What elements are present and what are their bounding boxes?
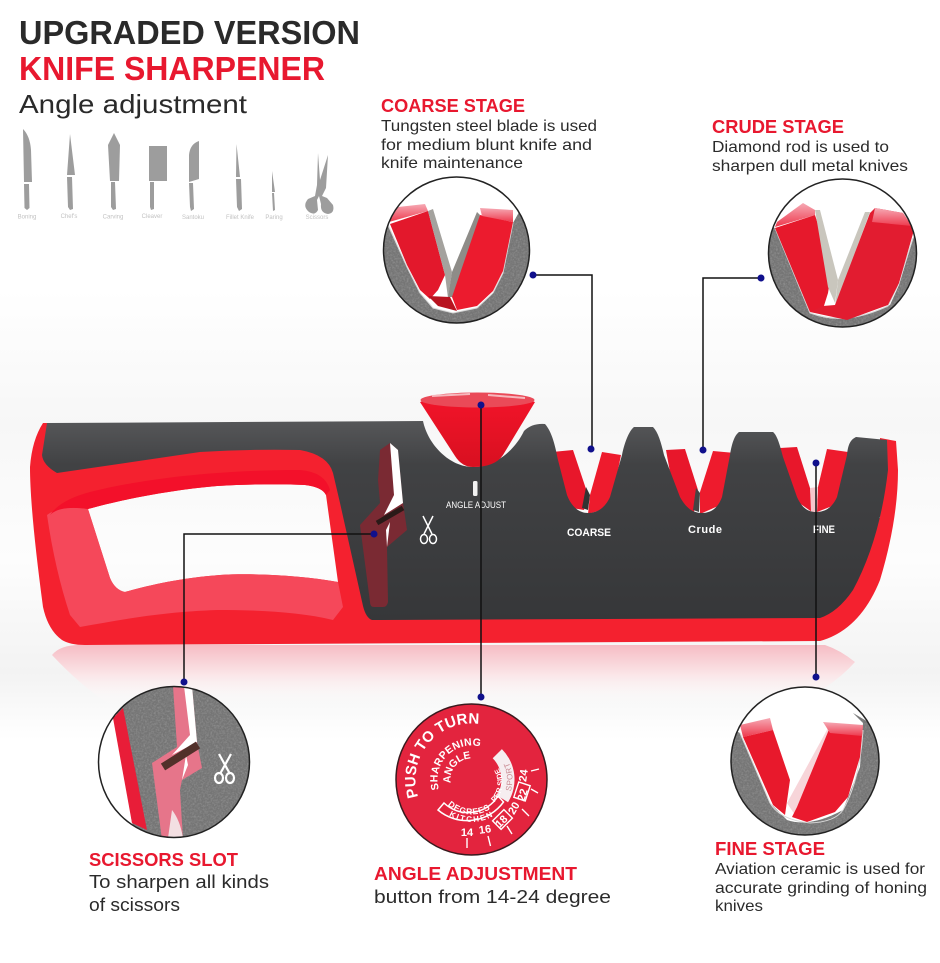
- label: crude: Crude: [688, 524, 722, 536]
- leader line: angle: [478, 402, 484, 700]
- degree scale: 22: [516, 787, 531, 803]
- icon: fillet knife: [236, 144, 242, 211]
- red outer shell: [30, 423, 898, 645]
- dial text: degrees: DEGREES: [448, 800, 490, 814]
- icon: santoku: [189, 141, 199, 211]
- callout text: scissors slot: To sharpen all kinds: [89, 872, 269, 892]
- handle highlight: lower bevel: [47, 508, 343, 627]
- callout text: angle adjustment: [374, 864, 611, 907]
- callout text: coarse stage: [381, 96, 597, 172]
- callout text: scissors slot: [89, 850, 269, 915]
- title line 1: UPGRADED VERSION: [19, 14, 360, 51]
- sport band: [493, 749, 515, 802]
- handle highlight: upper bevel: [50, 470, 330, 515]
- leader line: crude: [700, 274, 764, 454]
- degree scale: 18: [493, 813, 510, 830]
- dial text: per side: PER SIDE: [490, 768, 502, 802]
- knife names: Carving: [103, 214, 123, 220]
- subtitle: Angle adjustment: [19, 89, 248, 119]
- label: angle adjust: ANGLE ADJUST: [446, 500, 506, 510]
- degree scale: 24: [517, 768, 531, 782]
- knife names: Paring: [265, 215, 283, 221]
- icon: scissors: [305, 153, 333, 214]
- knife names: Cleaver: [142, 214, 162, 220]
- dial text: sport: SPORT: [504, 764, 512, 791]
- detail circle: fine stage: [730, 686, 882, 838]
- right red block: [810, 208, 914, 320]
- callout text: crude stage: [712, 117, 908, 175]
- rod: [163, 745, 198, 767]
- knife names: Chef's: [61, 214, 77, 220]
- knife names: Boning: [18, 214, 36, 220]
- callout text: fine stage: knives: [715, 898, 763, 915]
- left red block: [775, 203, 815, 227]
- dial text: sharpening: SHARPENING: [430, 738, 480, 790]
- callout text: coarse stage: Tungsten steel blade is used: [381, 118, 597, 135]
- callout text: crude stage: CRUDE STAGE: [712, 117, 844, 137]
- icon: carving knife: [108, 133, 120, 210]
- degree scale: 14: [461, 827, 474, 839]
- icon: boning knife: [23, 129, 32, 210]
- slot: [152, 686, 202, 840]
- callout text: fine stage: Aviation ceramic is used for: [715, 861, 926, 878]
- icon: paring knife: [272, 171, 275, 211]
- detail circle: crude stage: [768, 179, 918, 328]
- callout text: coarse stage: knife maintenance: [381, 155, 523, 172]
- callout text: scissors slot: SCISSORS SLOT: [89, 850, 238, 870]
- kitchen band: [438, 796, 504, 821]
- sharpening rod: [377, 508, 403, 523]
- callout text: angle adjustment: ANGLE ADJUSTMENT: [374, 864, 577, 884]
- callout text: crude stage: Diamond rod is used to: [712, 139, 889, 156]
- dark grip panel: [42, 421, 888, 620]
- label: coarse: COARSE: [567, 527, 611, 539]
- callout text: fine stage: FINE STAGE: [715, 839, 825, 859]
- icon: scissors: [420, 516, 436, 544]
- dial text: angle: ANGLE: [443, 751, 470, 783]
- callout text: coarse stage: COARSE STAGE: [381, 96, 525, 116]
- title line 2: KNIFE SHARPENER: [19, 50, 325, 87]
- knife names: Fillet Knife: [226, 215, 255, 221]
- right blade: [448, 212, 480, 297]
- degree scale: 20: [506, 800, 523, 817]
- leader line: scissors: [180, 530, 378, 686]
- icon: cleaver: [149, 146, 167, 210]
- callout text: coarse stage: for medium blunt knife and: [381, 137, 592, 154]
- adjust knob: [420, 392, 535, 467]
- left blade: [428, 209, 452, 298]
- callout text: scissors slot: of scissors: [89, 895, 180, 915]
- callout text: fine stage: [715, 839, 927, 915]
- sharpener body: [30, 392, 898, 645]
- degree scale: 16: [478, 823, 492, 837]
- left blade: [815, 210, 838, 303]
- white handle opening: [99, 714, 134, 825]
- degree scale: [461, 768, 539, 848]
- right red block: [792, 725, 863, 822]
- right blade: [835, 212, 870, 307]
- knife names: Santoku: [182, 215, 204, 221]
- angle dial: [395, 703, 548, 856]
- left red block: [740, 718, 773, 737]
- blade glare: [787, 729, 828, 814]
- knife type icon row: [18, 129, 333, 221]
- angle indicator mark: [473, 481, 478, 496]
- right red block: [452, 215, 513, 310]
- leader line: coarse: [530, 272, 594, 452]
- left red block: [389, 204, 428, 222]
- title: [19, 14, 360, 119]
- leader line: fine: [812, 460, 820, 680]
- red angle insert blocks in notches: [552, 447, 848, 514]
- dial text: push to turn: PUSH TO TURN: [404, 713, 478, 798]
- product reflection: [52, 645, 855, 705]
- callout text: fine stage: accurate grinding of honing: [715, 880, 927, 897]
- knife names: [18, 214, 328, 221]
- knife names: Scissors: [306, 215, 328, 221]
- callout text: angle adjustment: button from 14-24 degree: [374, 887, 611, 907]
- icon: chef's knife: [67, 134, 75, 210]
- label: fine: FINE: [813, 524, 835, 536]
- detail circle: scissors slot: [90, 686, 250, 845]
- scissors slot: [360, 443, 407, 607]
- icon: scissors: [215, 754, 234, 783]
- red rim stripe: [113, 708, 147, 830]
- callout text: crude stage: sharpen dull metal knives: [712, 158, 908, 175]
- detail circle: coarse stage: [383, 177, 532, 324]
- dial text: kitchen: KITCHEN: [449, 810, 492, 822]
